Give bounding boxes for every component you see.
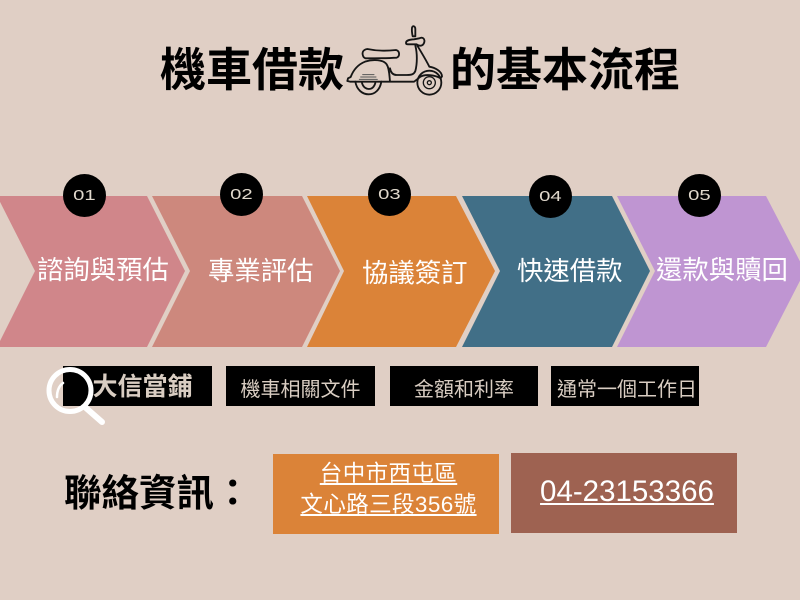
arrow 1 xyxy=(0,196,185,347)
detail box: 大信當鋪: 大信當鋪 xyxy=(92,373,192,401)
icon: magnifying glass xyxy=(46,367,105,425)
contact heading: 聯絡資訊： xyxy=(64,472,252,514)
arrow 2 xyxy=(152,196,340,347)
address box: 文心路三段356號 xyxy=(300,492,477,517)
chevron process arrows xyxy=(0,196,800,347)
step 1 number: 01 xyxy=(73,187,96,204)
detail box: 通常一個工作日 xyxy=(551,366,699,406)
step 3 number: 03 xyxy=(378,186,401,203)
step 3 number xyxy=(368,173,411,216)
phone box xyxy=(511,453,737,533)
step 2 number xyxy=(220,173,263,216)
title right text: 的基本流程 xyxy=(450,44,680,96)
step 2 number: 02 xyxy=(230,186,253,203)
step 2 label: 專業評估 xyxy=(208,256,314,286)
step 4 number xyxy=(529,175,572,218)
step 5 label: 還款與贖回 xyxy=(656,255,788,285)
detail box: 通常一個工作日: 通常一個工作日 xyxy=(557,379,697,401)
detail box: 大信當鋪 xyxy=(63,366,212,406)
step 5 number xyxy=(678,174,721,217)
phone box: 04-23153366 xyxy=(540,475,714,508)
detail box: 機車相關文件: 機車相關文件 xyxy=(240,379,360,401)
title xyxy=(160,44,680,96)
step 1 label: 諮詢與預估 xyxy=(37,255,169,285)
detail box: 機車相關文件 xyxy=(226,366,375,406)
step 1 number xyxy=(63,174,106,217)
arrow 5 xyxy=(617,196,800,347)
title left text: 機車借款 xyxy=(160,44,344,96)
detail box: 金額和利率 xyxy=(390,366,538,406)
arrow 3 xyxy=(307,196,495,347)
address box xyxy=(273,454,499,534)
step 4 number: 04 xyxy=(539,188,562,205)
icon: scooter xyxy=(346,25,443,96)
arrow 4 xyxy=(462,196,650,347)
address box: 台中市西屯區 xyxy=(320,461,457,486)
detail box: 金額和利率: 金額和利率 xyxy=(414,379,514,401)
step 4 label: 快速借款 xyxy=(517,256,623,286)
step 5 number: 05 xyxy=(688,187,711,204)
step 3 label: 協議簽訂 xyxy=(362,258,468,288)
